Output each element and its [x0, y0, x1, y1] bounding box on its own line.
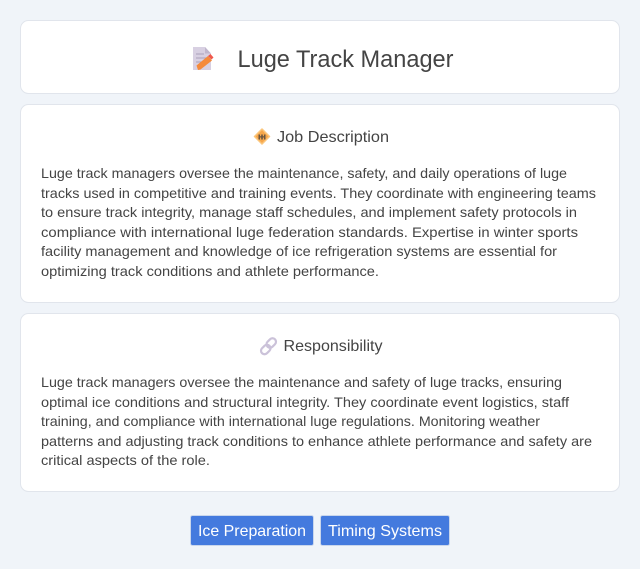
job description text: Luge track managers oversee the maintenance, safety, and daily operations of luge	[41, 165, 567, 181]
job description text: tracks used in competitive and training events. They coordinate with engineering teams	[41, 185, 596, 201]
icon: chain link	[260, 337, 277, 356]
responsibility text	[41, 374, 592, 468]
panel: job description	[20, 104, 620, 302]
job description heading: Job Description	[277, 129, 389, 146]
responsibility text: Luge track managers oversee the maintenance and safety of luge tracks, ensuring	[41, 374, 562, 390]
tag: Ice Preparation	[190, 516, 314, 546]
title text: Luge Track Manager	[238, 46, 454, 73]
job description text: to ensure track integrity, manage staff schedules, and implement safety protocols in	[41, 204, 577, 220]
responsibility heading: Responsibility	[284, 338, 382, 355]
job description text: optimizing track conditions and athlete performance.	[41, 263, 379, 279]
responsibility text: training, and compliance with international luge regulations. Monitoring weather	[41, 413, 540, 429]
job description text: compliance with international luge federation standards. Expertise in winter sports	[41, 224, 578, 240]
responsibility text: optimal ice conditions and structural integrity. They coordinate event logistics, staff	[41, 394, 569, 410]
responsibility text: patterns and adjusting track conditions to enhance athlete performance and safety are	[41, 433, 592, 449]
job description text: facility management and knowledge of ice refrigeration systems are essential for	[41, 243, 557, 259]
responsibility text: critical aspects of the role.	[41, 452, 210, 468]
job description text	[41, 165, 596, 279]
tag: Timing Systems: Timing Systems	[328, 523, 442, 540]
icon: document with pencil	[193, 47, 214, 70]
icon: road sign	[254, 129, 270, 144]
panel: responsibility	[20, 314, 620, 492]
tag: Ice Preparation: Ice Preparation	[198, 523, 306, 540]
panel: title	[20, 20, 620, 94]
tag: Timing Systems	[320, 516, 450, 546]
